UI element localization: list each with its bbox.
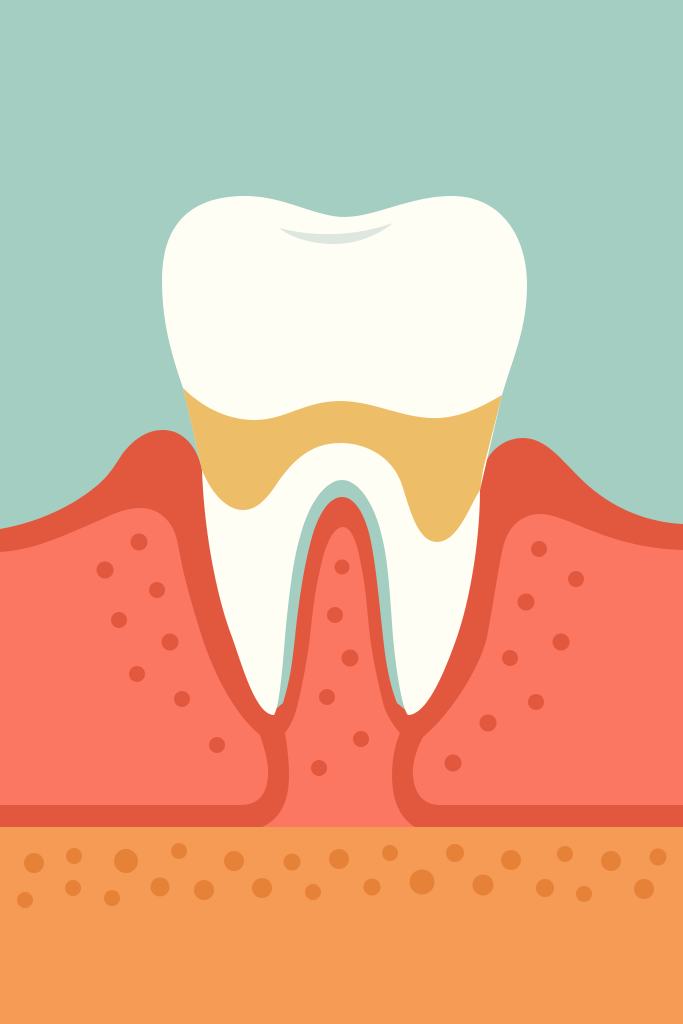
bone band (0, 827, 683, 1024)
tooth body (162, 196, 527, 715)
gum: dark outer layer (0, 430, 683, 827)
gum: right pad (413, 514, 683, 805)
bone layer (0, 827, 683, 1024)
gum speckles (96, 534, 584, 776)
tooth (162, 196, 527, 715)
gum: centre papilla (262, 527, 415, 827)
bone speckles (17, 843, 666, 908)
gum tissue (0, 430, 683, 827)
plaque band (183, 388, 502, 542)
gum: left pad (0, 508, 268, 805)
crown highlight (279, 223, 393, 244)
